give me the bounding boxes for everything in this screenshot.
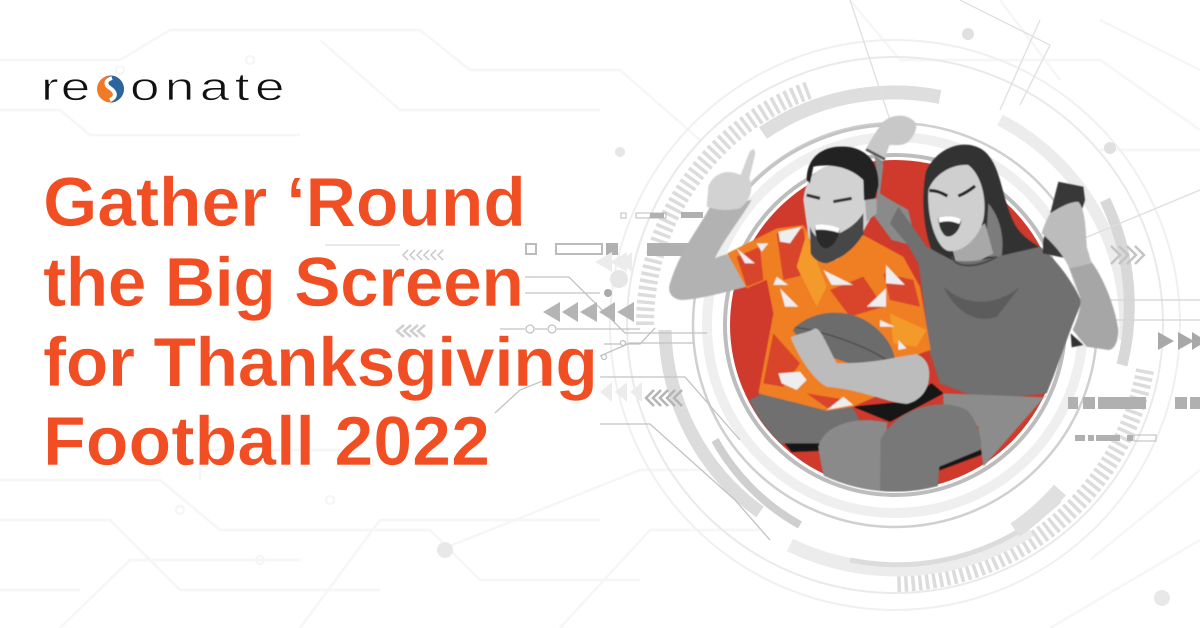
circuit nodes [604, 28, 1116, 297]
man's lower leg [818, 420, 887, 493]
title: Gather ‘Round [43, 163, 526, 241]
man's neck [813, 230, 870, 267]
arrows: left triangles [543, 302, 634, 322]
woman's neck [952, 223, 993, 272]
man's eyes and brows [807, 195, 852, 202]
man's mouth [815, 224, 840, 248]
photo: two cheering fans in a red circle [669, 116, 1118, 497]
phone [1043, 182, 1085, 258]
logo: resonate [41, 65, 290, 108]
concentric tech rings [610, 40, 1180, 610]
woman's hand [1042, 202, 1092, 268]
woman's back arm [873, 153, 917, 247]
lap shadow [853, 383, 943, 422]
man's hand and forearm [791, 328, 929, 404]
logo: resonate: re [41, 65, 92, 108]
man's raised arm [669, 200, 752, 300]
woman's fist [867, 116, 916, 162]
man's fist [707, 149, 755, 210]
logo: resonate: onate [130, 65, 290, 108]
seat shadow [784, 442, 820, 453]
woman's face [928, 165, 985, 251]
arrows: right triangles [1158, 332, 1200, 350]
woman's near leg [880, 404, 981, 493]
woman's hair [923, 145, 1042, 263]
woman [866, 116, 1118, 400]
man's head [803, 163, 873, 260]
man's shirt [727, 225, 931, 411]
woman's shirt [890, 207, 1082, 400]
man's thigh [749, 393, 863, 443]
rectangle markers [526, 212, 1200, 441]
man's ear [865, 198, 877, 222]
title: Football 2022 [43, 402, 490, 480]
woman's far leg [942, 392, 1046, 466]
arrows: chevrons [325, 245, 1144, 406]
jeans [749, 383, 1053, 493]
man [669, 147, 931, 411]
title [43, 163, 598, 480]
man's hair [807, 147, 878, 203]
logo mark [97, 76, 124, 102]
title: for Thanksgiving [43, 323, 598, 401]
arrows: faint left triangles [595, 252, 642, 402]
title: the Big Screen [43, 243, 524, 321]
football [793, 313, 895, 368]
circuit lines and markers [495, 0, 1200, 540]
man's beard [810, 213, 863, 263]
woman's raised arm [1065, 257, 1118, 350]
